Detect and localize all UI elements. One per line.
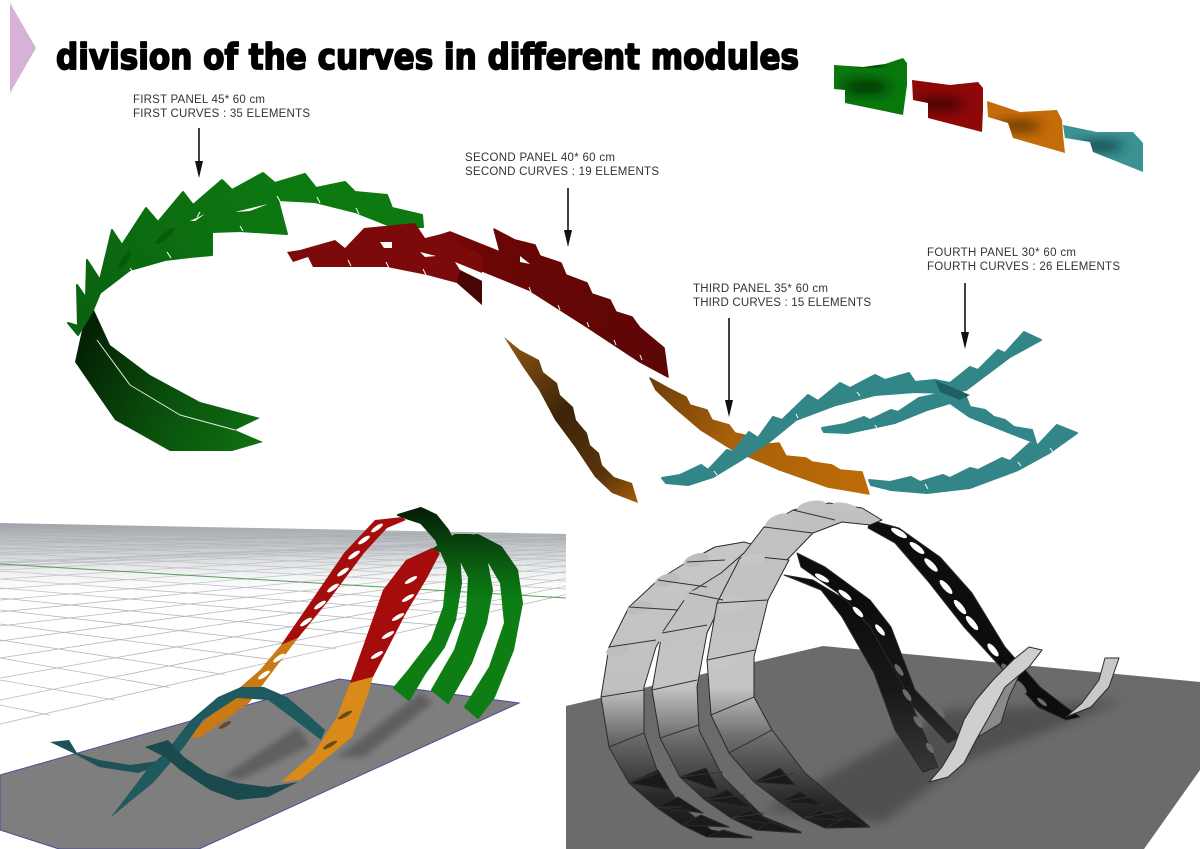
left render: ground plane: [0, 679, 519, 849]
fins on first arch: [629, 770, 752, 838]
ascending tail: light strip: [929, 647, 1042, 782]
orange main band: [650, 378, 869, 494]
label: first panel: FIRST CURVES : 35 ELEMENTS: [133, 108, 310, 120]
icon: heading triangle: [10, 3, 36, 93]
red arch two: [350, 548, 440, 683]
third curves: orange modules: [504, 337, 869, 503]
green lower band: [75, 308, 263, 451]
arrow: fourth panel: [961, 283, 969, 349]
label: third panel: THIRD PANEL 35* 60 cm: [693, 283, 828, 295]
middle arch: [652, 503, 882, 832]
first arch: [601, 542, 772, 837]
label: first panel: FIRST PANEL 45* 60 cm: [133, 94, 265, 106]
label: third panel: [693, 283, 871, 309]
module: teal panel: [1063, 125, 1143, 172]
green arch back: [455, 535, 522, 718]
red back band: [425, 229, 668, 377]
right render: cast shadow: [764, 700, 1123, 823]
bumps on front arch: [707, 552, 766, 671]
red arch one: [281, 517, 406, 645]
green arch front: [394, 508, 461, 700]
second curves: red modules: [287, 223, 668, 377]
arrow: first panel: [195, 128, 203, 178]
right render: monochrome arches: [601, 498, 1119, 838]
fins on middle arch: [680, 768, 801, 833]
label: second panel: SECOND CURVES : 19 ELEMENTS: [465, 166, 659, 178]
orange thin band: [504, 337, 638, 503]
label: third panel: THIRD CURVES : 15 ELEMENTS: [693, 297, 871, 309]
label: second panel: SECOND PANEL 40* 60 cm: [465, 152, 615, 164]
teal middle band: [822, 393, 1036, 443]
teal crossing band: [111, 687, 325, 817]
black strip of middle arch: [868, 520, 1080, 720]
bumps on first arch: [605, 550, 710, 659]
black strip of first arch: [797, 553, 960, 743]
teal upper band: [662, 332, 1041, 485]
teal lower band: [869, 425, 1077, 493]
front arch: [707, 557, 870, 828]
title: division of the curves in different modules: [56, 37, 799, 78]
module: red panel: [912, 80, 983, 132]
label: fourth panel: FOURTH PANEL 30* 60 cm: [927, 247, 1076, 259]
orange upper strip: [369, 587, 398, 633]
label: fourth panel: [927, 247, 1120, 273]
bumps on middle arch: [655, 498, 860, 645]
orange arch one: [188, 638, 298, 738]
teal front band: [145, 740, 298, 800]
module: green panel: [834, 58, 907, 115]
right render: ground plane: [566, 646, 1200, 849]
black strip of front arch: [784, 575, 938, 772]
first curves: green modules: [68, 173, 423, 451]
module: orange panel: [987, 101, 1065, 153]
teal left band: [50, 740, 184, 773]
label: first panel: [133, 94, 310, 120]
green upper band: [68, 173, 423, 335]
fins on front arch: [754, 768, 870, 828]
ascending tail: darker strip: [978, 650, 1042, 737]
label: second panel: [465, 152, 659, 178]
arrow: third panel: [725, 318, 733, 417]
module samples legend: [830, 55, 1146, 174]
arrow: second panel: [564, 188, 572, 247]
red front band: [287, 223, 482, 305]
orange arch two: [281, 677, 373, 782]
label: fourth panel: FOURTH CURVES : 26 ELEMENTS: [927, 261, 1120, 273]
green arch middle: [432, 535, 492, 703]
fourth curves: teal modules: [662, 332, 1077, 493]
left render: cast shadows: [222, 693, 432, 780]
ascending tail: far strip: [1066, 658, 1119, 717]
left render: colored arches: [50, 508, 522, 817]
left render: grid plane: [0, 523, 566, 724]
